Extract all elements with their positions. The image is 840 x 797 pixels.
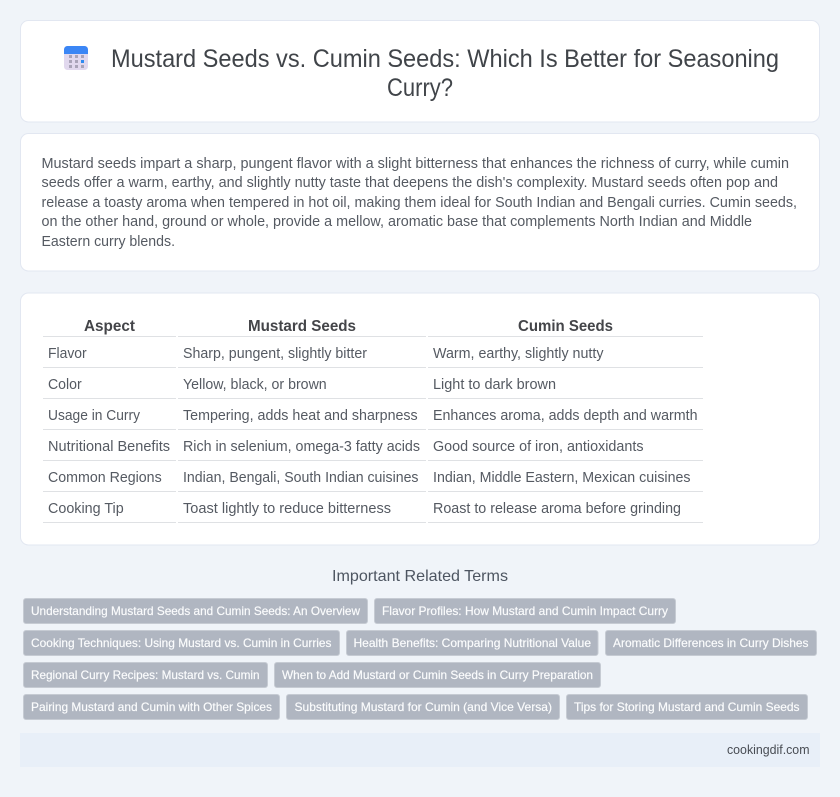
title: Curry?	[387, 74, 453, 102]
table row: Nutritional Benefits: Good source of iron, antioxidants	[433, 439, 644, 455]
table row: Common Regions: Indian, Bengali, South Indian cuisines	[183, 470, 418, 486]
tag: substituting	[286, 694, 560, 720]
heading: important related terms: Important Related Terms	[332, 568, 508, 585]
table row: Flavor: Warm, earthy, slightly nutty	[433, 346, 604, 362]
table row: Flavor	[43, 346, 703, 368]
table row: Common Regions: Indian, Middle Eastern, Mexican cuisines	[433, 470, 690, 486]
table row: Usage in Curry: Enhances aroma, adds depth and warmth	[433, 408, 698, 424]
table row: Nutritional Benefits: Nutritional Benefits	[48, 439, 170, 455]
tag: storing	[566, 694, 808, 720]
title	[111, 45, 779, 102]
title: Mustard Seeds vs. Cumin Seeds: Which Is Better for Seasoning	[111, 45, 779, 73]
icon: calendar	[64, 46, 88, 70]
tag: flavor profiles	[374, 598, 676, 624]
table row: Flavor: Sharp, pungent, slightly bitter	[183, 346, 367, 362]
intro paragraph: seeds offer a warm, earthy, and slightly nutty taste that deepens the dish's complexity. Mustard seeds often pop and	[42, 175, 778, 191]
tag: regional recipes: Regional Curry Recipes: Mustard vs. Cumin	[31, 668, 260, 682]
tag: overview	[24, 598, 368, 624]
table row: Usage in Curry	[43, 408, 703, 430]
table row: Color: Yellow, black, or brown	[183, 377, 327, 393]
tag: storing: Tips for Storing Mustard and Cumin Seeds	[574, 700, 800, 714]
tag: substituting: Substituting Mustard for Cumin (and Vice Versa)	[294, 700, 552, 714]
intro paragraph	[42, 156, 797, 250]
tag: aromatic differences: Aromatic Differences in Curry Dishes	[613, 636, 808, 650]
table header row: Aspect	[84, 318, 136, 335]
table header row: Cumin Seeds	[518, 318, 613, 335]
footer source text: cookingdif.com	[727, 742, 810, 757]
table row: Nutritional Benefits	[43, 439, 703, 460]
table header row: Mustard Seeds	[248, 318, 356, 335]
table row: Cooking Tip	[43, 501, 703, 522]
table row: Cooking Tip: Cooking Tip	[48, 501, 124, 517]
table header row	[43, 318, 703, 336]
table row: Cooking Tip: Toast lightly to reduce bitterness	[183, 501, 391, 517]
tag: health benefits: Health Benefits: Comparing Nutritional Value	[354, 636, 591, 650]
table row: Common Regions	[43, 470, 703, 492]
tag: cooking techniques: Cooking Techniques: Using Mustard vs. Cumin in Curries	[31, 636, 332, 650]
table row: Color: Light to dark brown	[433, 377, 556, 393]
tag: pairing	[24, 694, 280, 720]
tag: when to add: When to Add Mustard or Cumin Seeds in Curry Preparation	[282, 668, 593, 682]
tag: overview: Understanding Mustard Seeds and Cumin Seeds: An Overview	[31, 604, 360, 618]
tag: pairing: Pairing Mustard and Cumin with Other Spices	[31, 700, 272, 714]
panel: title header	[20, 20, 820, 122]
tag: cooking techniques	[24, 630, 340, 656]
tag: flavor profiles: Flavor Profiles: How Mustard and Cumin Impact Curry	[382, 604, 668, 618]
intro paragraph: release a toasty aroma when tempered in hot oil, making them ideal for South Indian and Bengali curries. Cumin seeds,	[42, 195, 797, 211]
tag group: related terms	[24, 598, 816, 720]
tag: regional recipes	[24, 662, 268, 688]
table row: Flavor: Flavor	[48, 346, 87, 362]
table row: Usage in Curry: Tempering, adds heat and sharpness	[183, 408, 418, 424]
table row: Cooking Tip: Roast to release aroma before grinding	[433, 501, 681, 517]
intro paragraph: on the other hand, ground or whole, provide a mellow, aromatic base that complements North Indian and Middle	[42, 214, 752, 230]
footer bar	[20, 733, 820, 767]
panel: comparison table	[20, 293, 820, 545]
intro paragraph: Eastern curry blends.	[42, 234, 175, 250]
table row: Nutritional Benefits: Rich in selenium, omega-3 fatty acids	[183, 439, 420, 455]
table row: Color: Color	[48, 377, 82, 393]
tag: health benefits	[346, 630, 598, 656]
tag: when to add	[274, 662, 600, 688]
table row: Usage in Curry: Usage in Curry	[48, 408, 141, 424]
table row: Common Regions: Common Regions	[48, 470, 162, 486]
table row: Color	[43, 377, 703, 398]
intro paragraph: Mustard seeds impart a sharp, pungent flavor with a slight bitterness that enhances the richness of curry, while cumin	[42, 156, 789, 172]
panel: introduction	[20, 134, 820, 271]
tag: aromatic differences	[606, 630, 816, 656]
